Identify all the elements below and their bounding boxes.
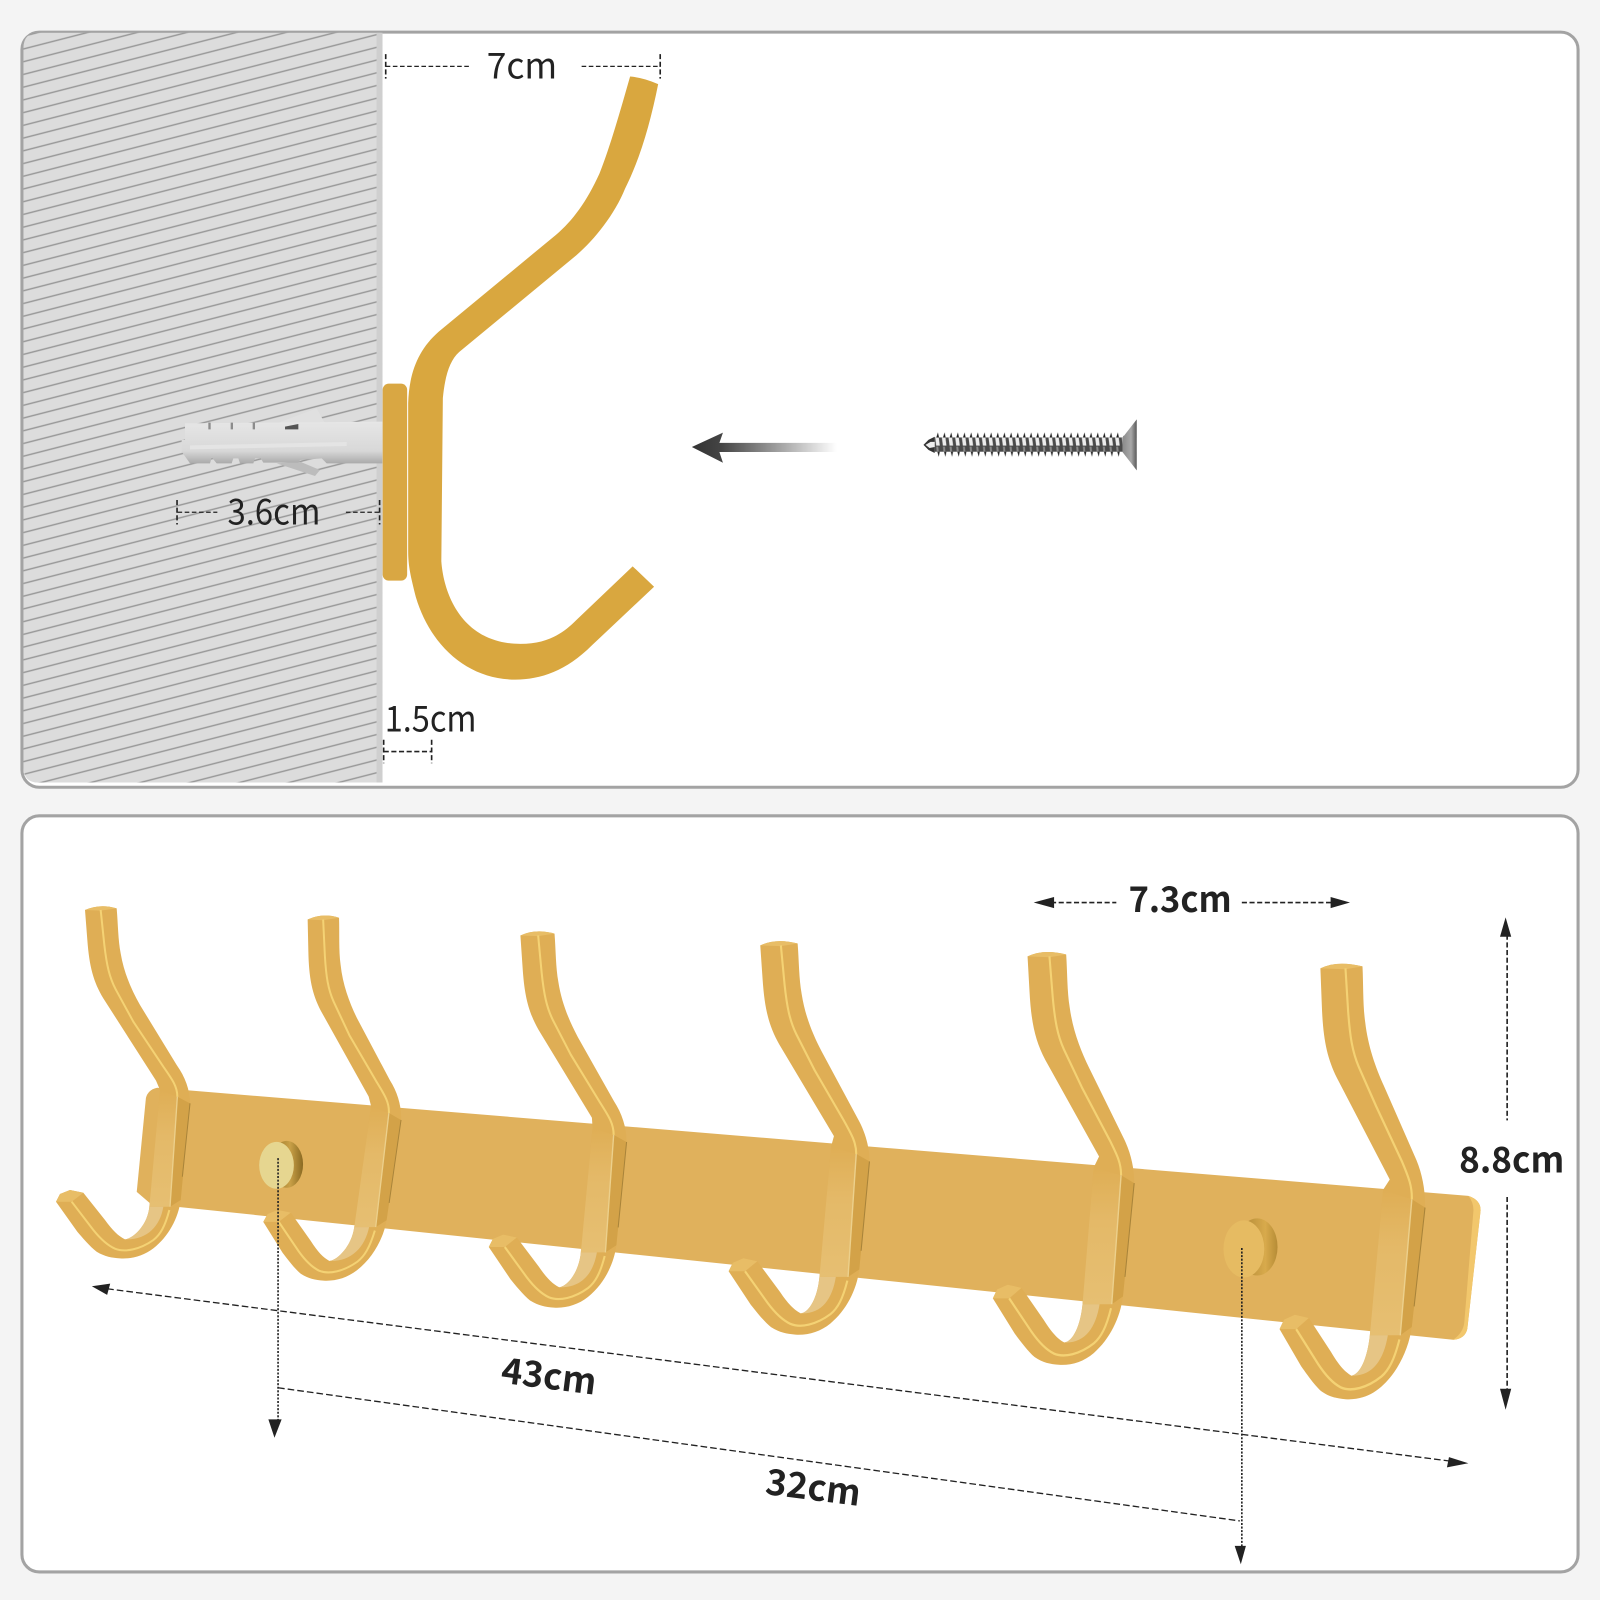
- wall cross-section: [22, 33, 383, 783]
- panel: side view: [22, 32, 1578, 787]
- panel frame: [22, 816, 1578, 1572]
- hook 6: [1278, 964, 1432, 1399]
- dimension: 7.3cm hook spacing: [1034, 872, 1350, 923]
- wall anchor: [182, 408, 382, 476]
- dimension: 32cm screw spacing: [268, 1158, 1246, 1564]
- dimension: 43cm overall length: 43cm: [499, 1343, 600, 1406]
- screw: [923, 419, 1137, 470]
- screw cap left: [259, 1141, 303, 1189]
- panel frame: [22, 32, 1578, 787]
- dimension: 7.3cm hook spacing: 7.3cm: [1129, 872, 1232, 923]
- side view hook: [408, 77, 658, 680]
- dimension: 7cm: 7cm: [487, 39, 557, 90]
- dimension: 3.6cm: [177, 484, 380, 535]
- mounting plate: [383, 384, 407, 581]
- dimension: 7cm: [386, 39, 660, 90]
- hook 3: [488, 931, 628, 1308]
- panel: front view: [22, 816, 1578, 1572]
- dimension: 3.6cm: 3.6cm: [228, 484, 320, 535]
- hook 4: [728, 941, 870, 1335]
- dimension: 1.5cm: 1.5cm: [385, 692, 477, 743]
- dimension: 8.8cm height: [1459, 917, 1564, 1410]
- dimension: 8.8cm height: 8.8cm: [1459, 1132, 1564, 1183]
- hook 2: [260, 916, 412, 1281]
- hook 5: [992, 952, 1137, 1365]
- dimension: 43cm overall length: [92, 1284, 1468, 1467]
- dimension: 32cm screw spacing: 32cm: [763, 1454, 864, 1517]
- screw cap right: [1223, 1218, 1278, 1278]
- dimension: 1.5cm: [384, 692, 477, 763]
- hook 1: [56, 906, 190, 1258]
- mounting rail: [137, 1088, 1481, 1340]
- arrow pointing to wall: [692, 433, 837, 463]
